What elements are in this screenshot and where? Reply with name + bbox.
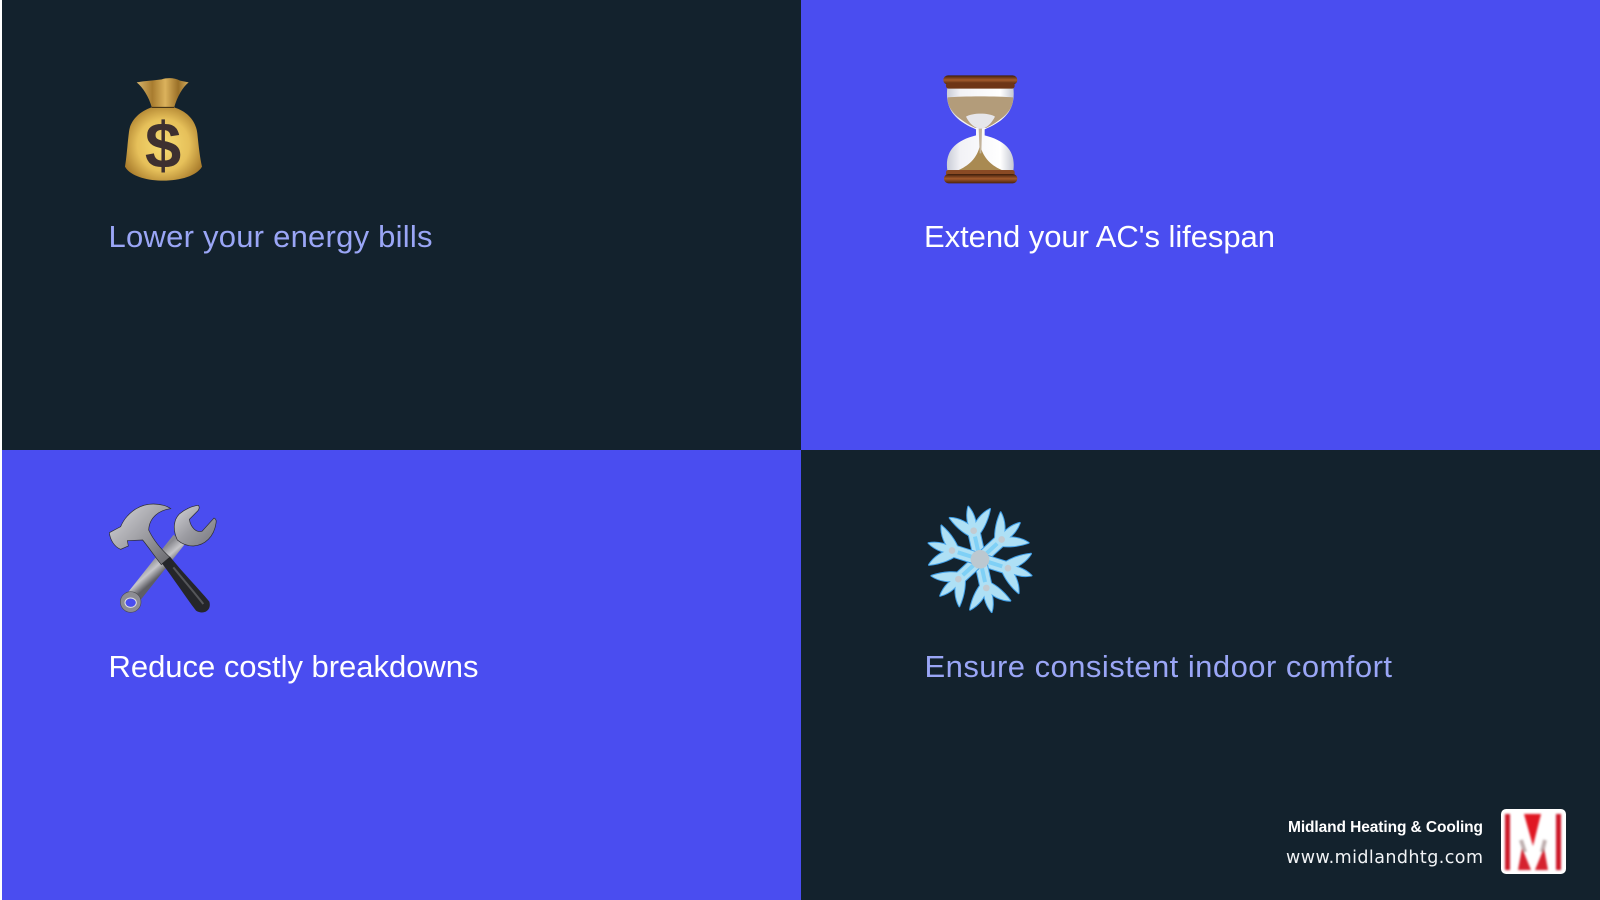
icon: money bag: $ — [145, 108, 181, 181]
brand block — [1286, 809, 1566, 874]
text: reduce breakdowns: Reduce costly breakdowns — [108, 649, 478, 684]
text: indoor comfort: Ensure consistent indoor comfort — [924, 649, 1392, 684]
panel: indoor comfort — [801, 450, 1600, 900]
icon: money bag — [125, 78, 202, 181]
panel: lower energy bills — [2, 0, 801, 450]
icon: hammer and wrench — [109, 504, 216, 613]
text: extend lifespan: Extend your AC's lifespan — [924, 219, 1275, 254]
icon: hourglass — [943, 75, 1017, 183]
text: lower energy bills: Lower your energy bills — [108, 219, 432, 254]
brand name: Midland Heating & Cooling — [1288, 819, 1483, 836]
panel: reduce breakdowns — [2, 450, 801, 900]
brand url: www.midlandhtg.com — [1286, 848, 1483, 868]
panel: extend lifespan — [801, 0, 1600, 450]
icon: snowflake — [922, 502, 1038, 617]
logo — [1501, 809, 1566, 874]
